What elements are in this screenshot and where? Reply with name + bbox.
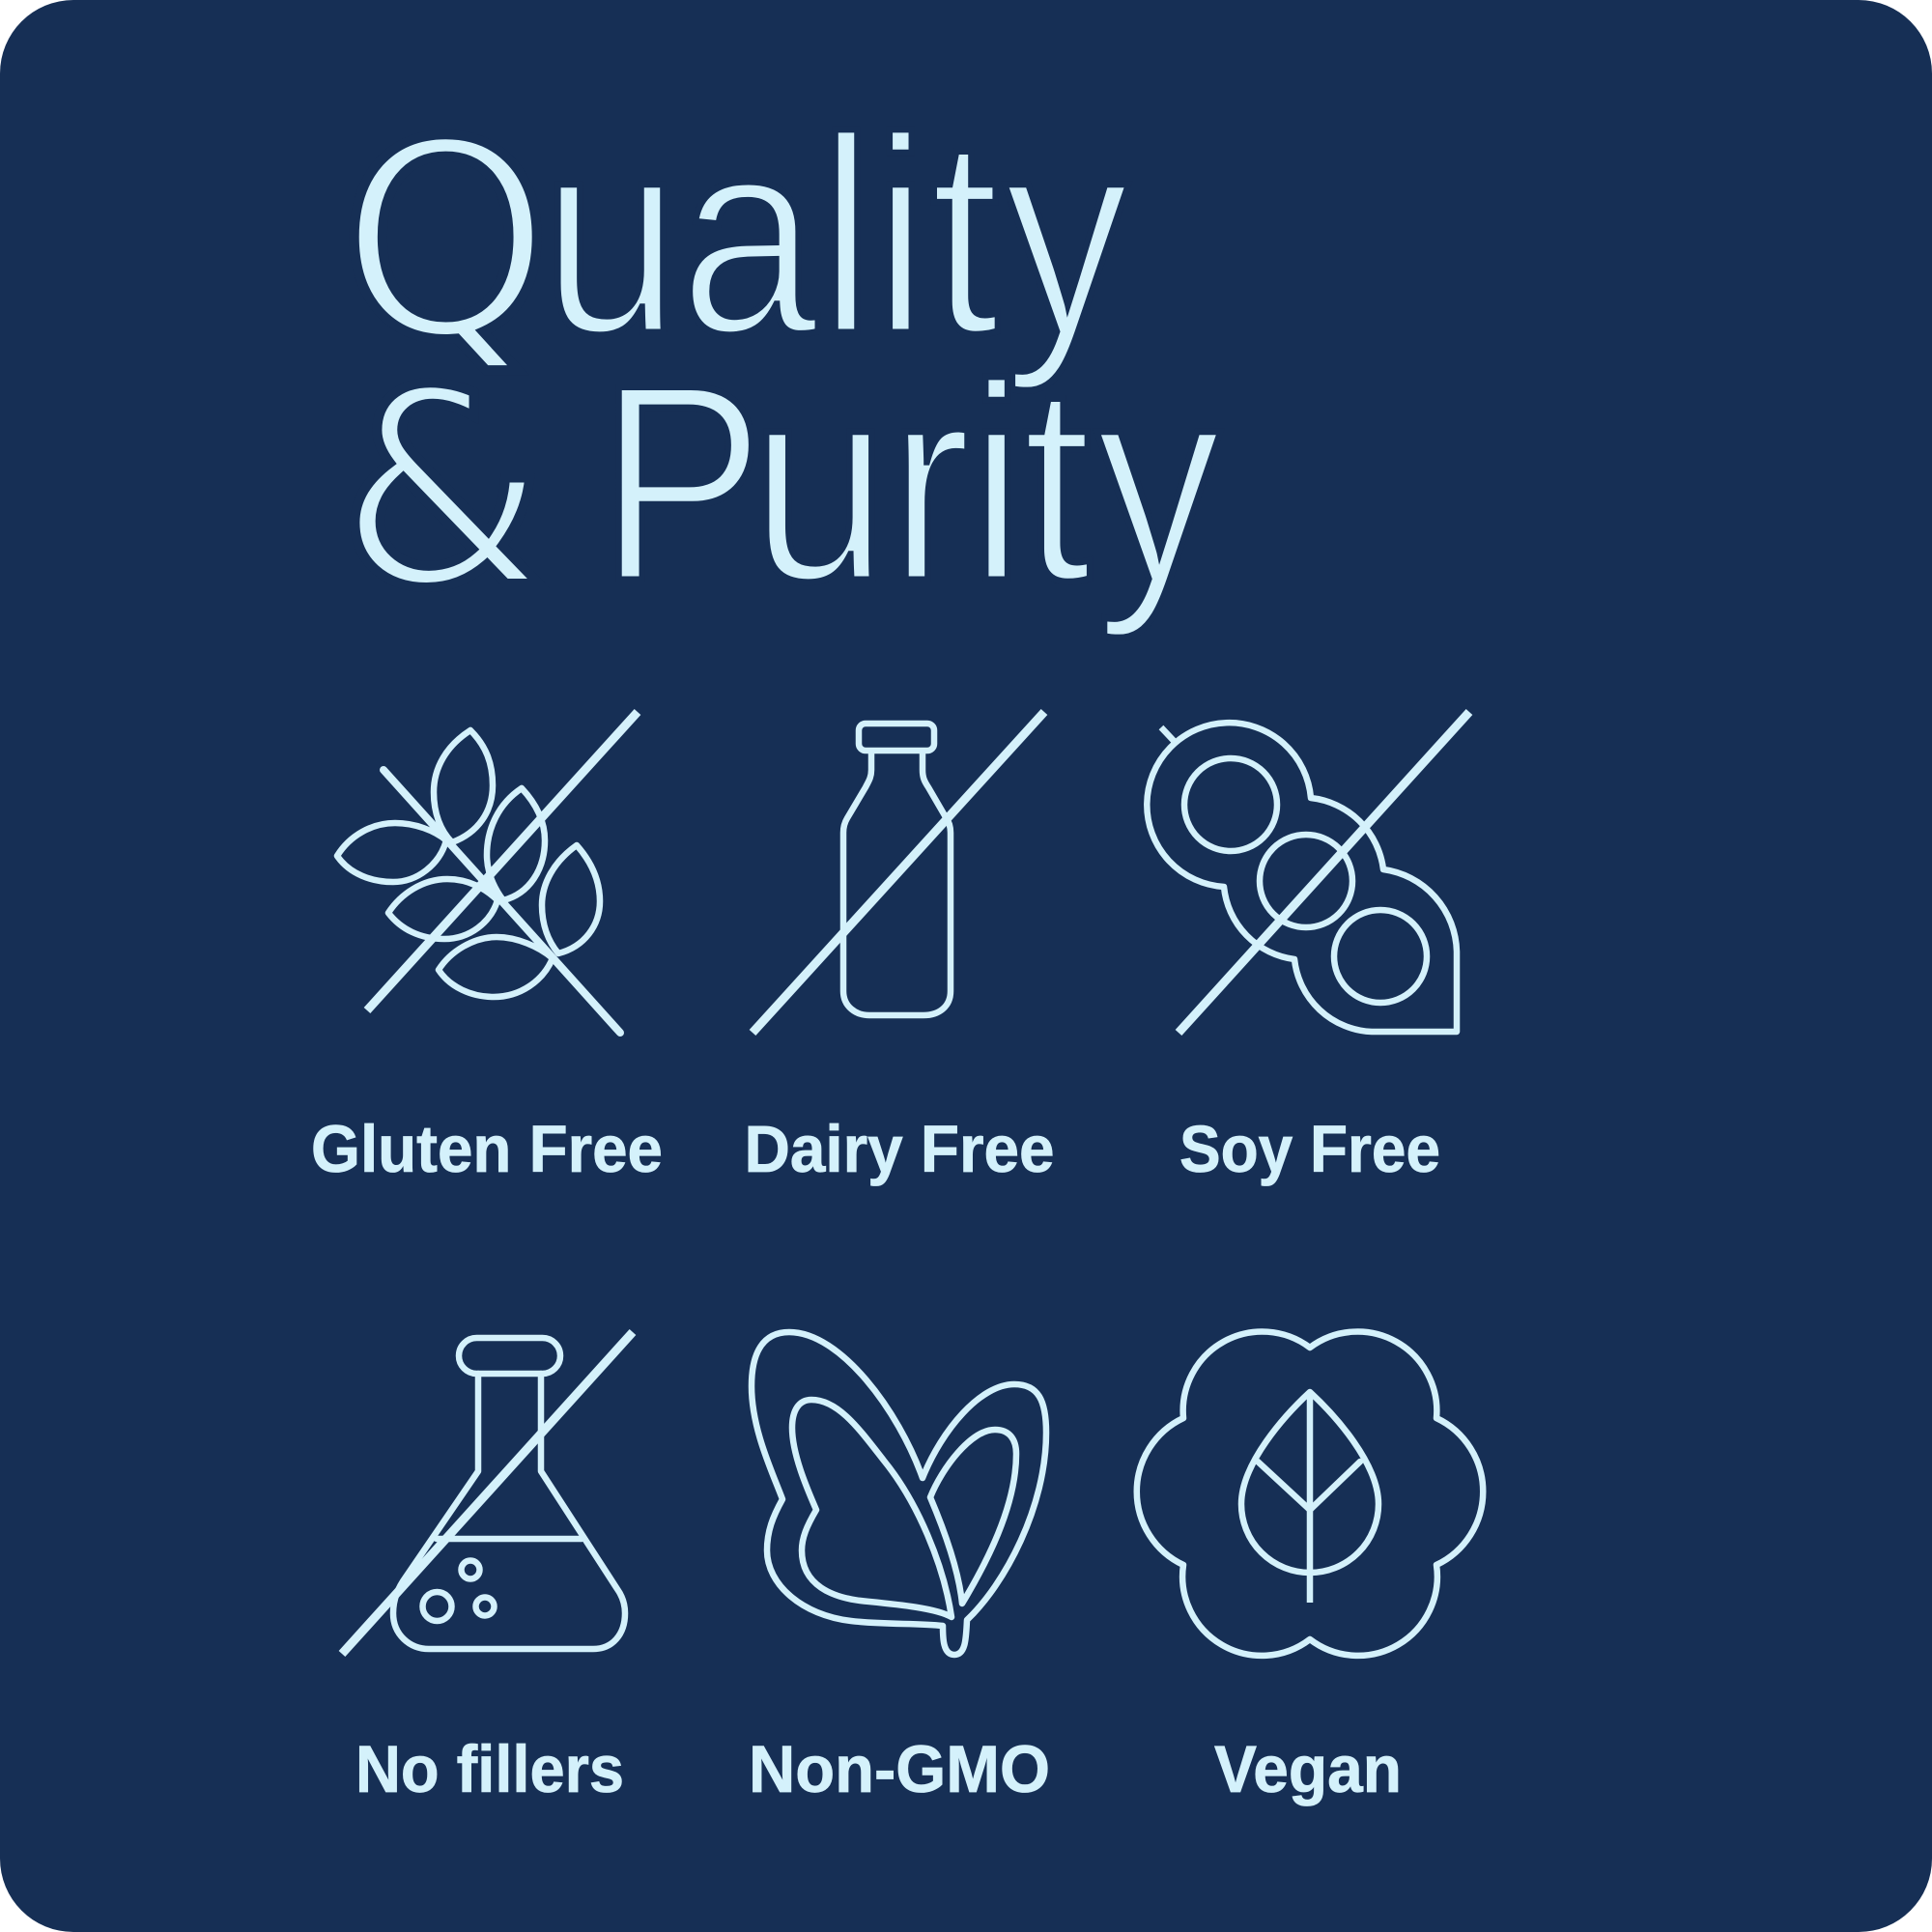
title: uality — [542, 79, 1129, 393]
icon: soy free pod — [1147, 712, 1469, 1033]
title — [338, 79, 1221, 647]
icon: non-GMO sprout — [752, 1332, 1046, 1655]
label: soy free: Soy Free — [1179, 1112, 1440, 1186]
title: Purity — [598, 327, 1221, 640]
icon: gluten free wheat — [337, 712, 638, 1033]
title: & — [338, 332, 547, 647]
title: Q — [339, 85, 552, 400]
icon: no fillers flask — [342, 1332, 633, 1654]
label: non-GMO: Non-GMO — [749, 1732, 1050, 1806]
label: vegan: Vegan — [1214, 1732, 1402, 1806]
label: no fillers: No fillers — [355, 1732, 624, 1806]
label: gluten free: Gluten Free — [311, 1112, 663, 1186]
icon: dairy free bottle — [753, 712, 1044, 1033]
icon: vegan leaf in cloud — [1137, 1331, 1483, 1656]
label: dairy free: Dairy Free — [744, 1112, 1055, 1186]
